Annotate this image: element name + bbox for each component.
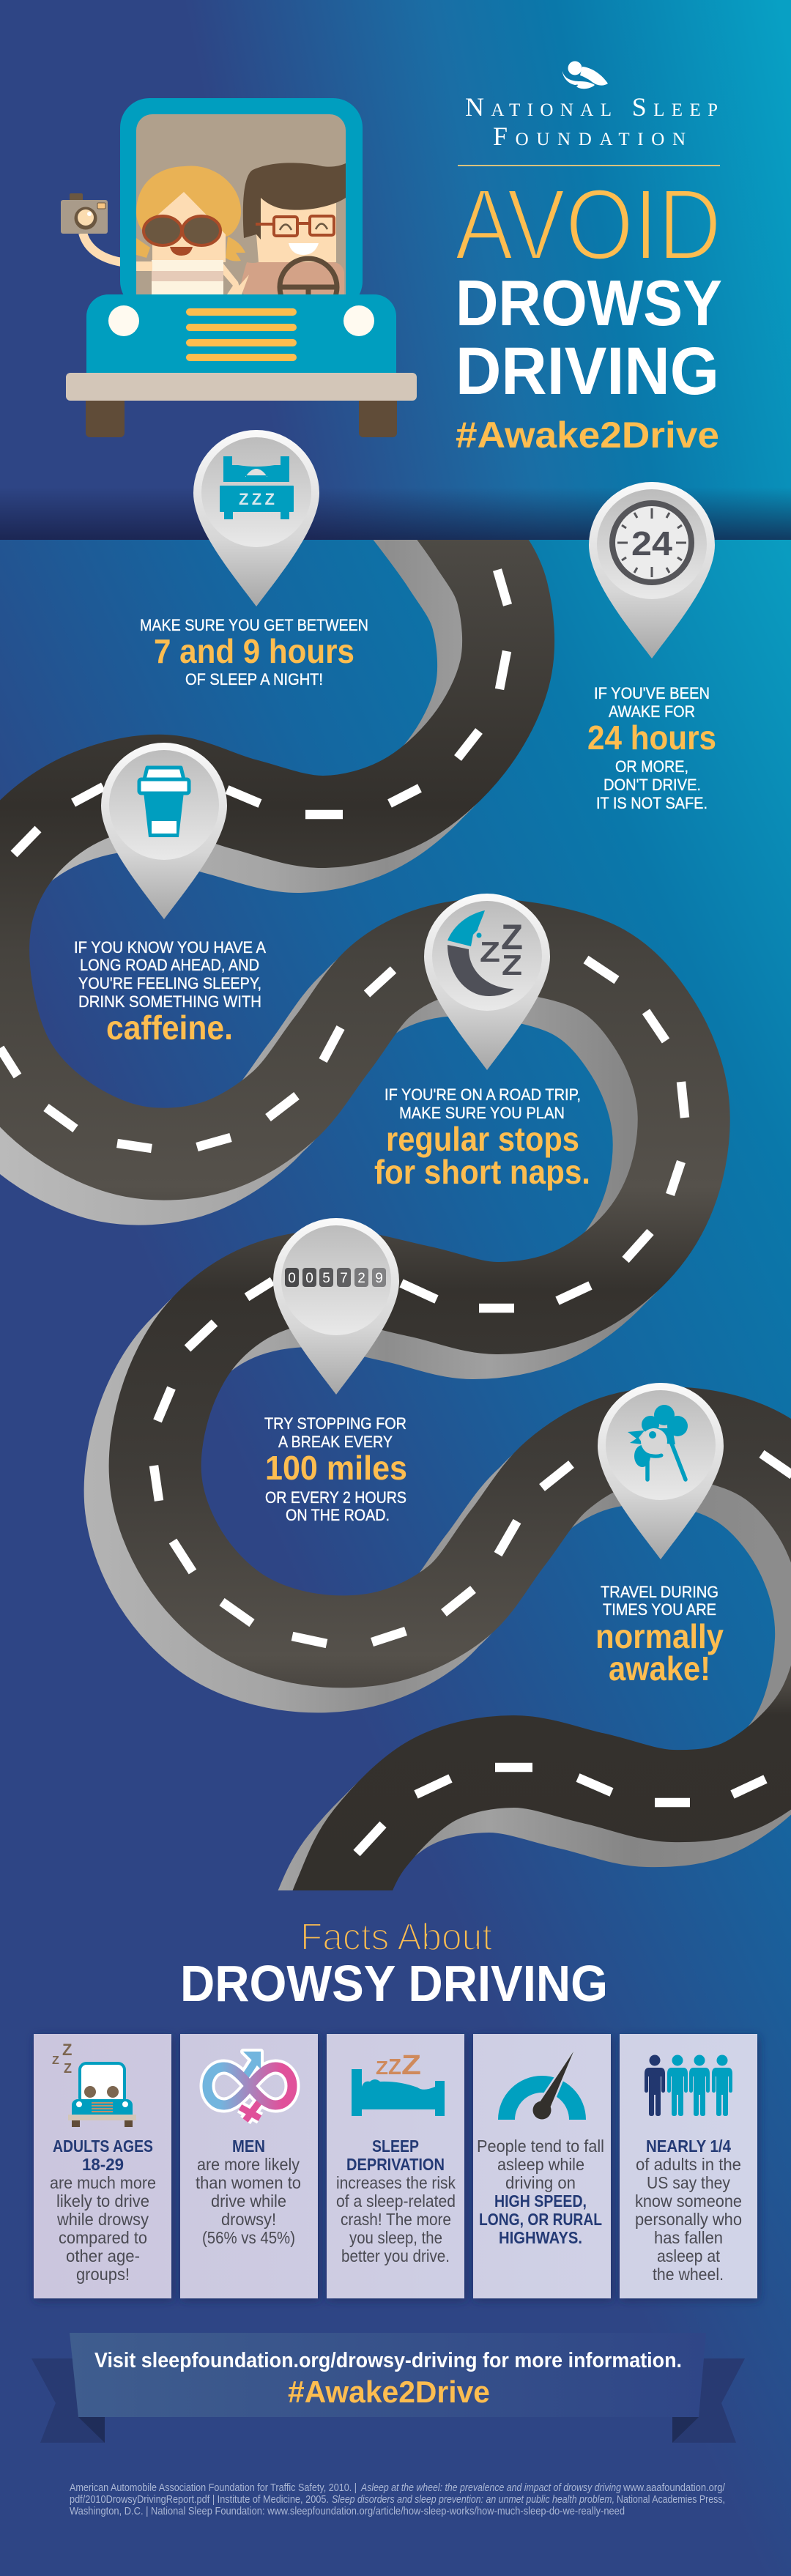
logo wordmark: National Sleep [465, 92, 718, 122]
caption: caffeine: LONG ROAD AHEAD, AND [80, 956, 259, 974]
logo wordmark [465, 92, 718, 151]
card text: while drowsy [56, 2210, 149, 2229]
card text: are more likely [197, 2155, 300, 2174]
caption: normally awake [595, 1583, 724, 1688]
caption: 24 hours: 24 hours [587, 719, 716, 757]
caption: mileage: TRY STOPPING FOR [264, 1414, 406, 1433]
ribbon body [70, 2333, 706, 2417]
panel: adults ages 18-29 [34, 2034, 171, 2298]
background: lower section [0, 540, 791, 2576]
icon: bed [220, 456, 294, 519]
card text: of adults in the [636, 2155, 741, 2174]
card text [196, 2137, 301, 2247]
card text: MEN [232, 2137, 265, 2156]
card text: People tend to fall [477, 2137, 604, 2156]
caption: sleep hours [140, 616, 368, 688]
camera [61, 193, 108, 234]
card text: US say they [647, 2173, 730, 2192]
icon: moon with nightcap: Z [501, 918, 523, 957]
caption: caffeine: IF YOU KNOW YOU HAVE A [74, 938, 266, 957]
card text: other age- [66, 2246, 140, 2265]
card text [635, 2137, 742, 2284]
pin: sleep hours [193, 430, 319, 606]
heading: facts about drowsy driving: Facts About [300, 1916, 493, 1959]
icon: odometer: 5 [322, 1271, 330, 1286]
card text: of a sleep-related [336, 2191, 456, 2211]
card text: asleep at [657, 2246, 721, 2265]
caption: 24 hours: IF YOU'VE BEEN [594, 684, 710, 702]
banner text: Visit sleepfoundation.org/drowsy-driving for more information. [94, 2349, 682, 2372]
caption: 24 hours [587, 684, 716, 812]
icon: sleepy truck: Z [62, 2041, 72, 2059]
window interior [136, 114, 346, 294]
headlights [108, 305, 139, 336]
passenger [136, 166, 245, 294]
caption: naps: IF YOU'RE ON A ROAD TRIP, [385, 1085, 581, 1104]
caption: naps [374, 1085, 590, 1191]
icon: clock [612, 503, 691, 582]
icon: coffee cup [139, 768, 189, 837]
card text: drive while [211, 2191, 286, 2211]
divider rule [458, 165, 720, 166]
caption: 24 hours: AWAKE FOR [609, 702, 695, 721]
caption: caffeine: YOU'RE FEELING SLEEPY, [78, 974, 261, 992]
icon: odometer [285, 1268, 386, 1287]
card text: compared to [59, 2228, 147, 2247]
caption: sleep hours: MAKE SURE YOU GET BETWEEN [140, 616, 368, 634]
logo wordmark: Foundation [493, 122, 686, 151]
pin: mileage [273, 1218, 399, 1395]
ribbon tails [31, 2358, 745, 2443]
caption: sleep hours: 7 and 9 hours [154, 632, 354, 670]
title: DROWSY [456, 267, 722, 339]
card text: (56% vs 45%) [202, 2228, 295, 2247]
caption: 24 hours: OR MORE, [615, 757, 688, 776]
caption: naps: MAKE SURE YOU PLAN [399, 1104, 565, 1122]
icon: moon with nightcap: Z [502, 950, 522, 981]
card text: SLEEP [372, 2137, 419, 2156]
steering wheel [277, 256, 340, 294]
card text: LONG, OR RURAL [479, 2210, 602, 2229]
footer: references: pdf/2010DrowsyDrivingReport.pdf | Institute of Medicine, 2005. [70, 2494, 329, 2506]
card text: personally who [635, 2210, 742, 2229]
caption: mileage: 100 miles [265, 1449, 407, 1487]
caption: normally awake: TRAVEL DURING [601, 1583, 718, 1601]
banner: call to action [31, 2333, 745, 2443]
icon: sleepy truck [52, 2041, 136, 2127]
bumper [66, 373, 417, 401]
card text [50, 2137, 156, 2284]
icon: speedometer [498, 2052, 586, 2120]
icon: bed: Z [376, 2057, 388, 2079]
card text: ADULTS AGES [53, 2137, 153, 2156]
icon: bed [352, 2050, 445, 2116]
driver [239, 163, 346, 294]
caption: mileage: OR EVERY 2 HOURS [265, 1488, 406, 1507]
banner text: #Awake2Drive [288, 2375, 490, 2409]
icon: bed: ZZZ [239, 490, 275, 508]
icon: bed: Z [401, 2050, 421, 2081]
footer: references: www.aaafoundation.org/ [623, 2482, 726, 2494]
card text: 18-29 [82, 2155, 124, 2174]
road surface [0, 483, 791, 1948]
pin: naps [424, 894, 550, 1070]
icon: rooster [628, 1405, 688, 1480]
caption: naps: for short naps. [374, 1153, 590, 1191]
caption: mileage [264, 1414, 407, 1524]
pin: 24 hours [589, 482, 715, 658]
heading: facts about drowsy driving [180, 1916, 608, 2012]
icon: odometer: 9 [375, 1271, 383, 1286]
card text: HIGHWAYS. [499, 2228, 582, 2247]
card text: the wheel. [653, 2265, 724, 2284]
title: DRIVING [456, 334, 719, 409]
winding road [0, 483, 791, 1973]
caption: normally awake: awake! [609, 1649, 710, 1688]
camera arm [83, 233, 122, 262]
icon: bed: Z [388, 2054, 401, 2079]
caption: 24 hours: DON'T DRIVE. [604, 776, 701, 794]
road side wall [0, 496, 791, 1973]
footer: references: Asleep at the wheel: the prevalence and impact of drowsy driving [360, 2482, 621, 2494]
grille [186, 308, 297, 361]
caption: caffeine: caffeine. [106, 1009, 233, 1047]
card text: has fallen [654, 2228, 723, 2247]
caption: naps: regular stops [386, 1120, 579, 1158]
card text: you sleep, the [349, 2228, 442, 2247]
panel: men [180, 2034, 318, 2298]
hood [86, 294, 396, 374]
card text [477, 2137, 604, 2247]
caption: normally awake: TIMES YOU ARE [603, 1600, 716, 1619]
icon: odometer: 0 [288, 1271, 296, 1286]
icon: odometer: 0 [305, 1271, 313, 1286]
caption: mileage: ON THE ROAD. [286, 1506, 390, 1524]
card text: than women to [196, 2173, 301, 2192]
caption: mileage: A BREAK EVERY [278, 1433, 393, 1451]
title: AVOID [455, 168, 721, 281]
card text: know someone [635, 2191, 742, 2211]
title: #Awake2Drive [456, 415, 719, 456]
card text: likely to drive [56, 2191, 149, 2211]
caption: sleep hours: OF SLEEP A NIGHT! [185, 670, 323, 688]
card text: drowsy! [221, 2210, 276, 2229]
cab [120, 98, 363, 311]
heading: facts about drowsy driving: DROWSY DRIVING [180, 1955, 608, 2012]
card text: HIGH SPEED, [494, 2191, 587, 2211]
card text: asleep while [497, 2155, 584, 2174]
icon: odometer: 7 [340, 1271, 348, 1286]
card text: driving on [505, 2173, 576, 2192]
footer: references: Washington, D.C. | National Sleep Foundation: www.sleepfoundation.org/article/how-sleep-works/how-much-sleep-do-we-really-need [70, 2506, 625, 2517]
footer: references: American Automobile Association Foundation for Traffic Safety, 2010. | [70, 2482, 357, 2494]
icon: odometer: 2 [357, 1271, 365, 1286]
card text: crash! The more [341, 2210, 451, 2229]
road centre dashes [0, 570, 791, 1853]
icon: clock: 24 [631, 524, 672, 563]
icon: moon with nightcap [448, 910, 523, 996]
card text: DEPRIVATION [346, 2155, 445, 2174]
caption: normally awake: normally [595, 1617, 724, 1655]
icon: National Sleep Foundation logo [562, 62, 608, 89]
card text: better you drive. [341, 2246, 450, 2265]
icon: four people [645, 2055, 732, 2116]
footer: references: Sleep disorders and sleep prevention: an unmet public health problem, [332, 2494, 614, 2506]
header section background [0, 0, 791, 540]
panel: nearly one quarter [620, 2034, 757, 2298]
wheels [86, 401, 125, 437]
panel: highways [473, 2034, 611, 2298]
title [455, 168, 722, 456]
icon: sleepy truck: Z [52, 2055, 59, 2067]
icon: moon with nightcap: Z [480, 937, 500, 968]
panel: sleep deprivation [327, 2034, 464, 2298]
card text: groups! [76, 2265, 130, 2284]
card text: are much more [50, 2173, 156, 2192]
caption: 24 hours: IT IS NOT SAFE. [596, 794, 708, 812]
pin: caffeine [101, 743, 227, 919]
card text: NEARLY 1/4 [646, 2137, 731, 2156]
caption: caffeine [74, 938, 266, 1047]
card text [336, 2137, 456, 2265]
icon: gender infinity [207, 2052, 292, 2120]
icon: sleepy truck: Z [64, 2061, 72, 2076]
banner text [94, 2349, 682, 2409]
pin: normally awake [598, 1383, 724, 1559]
truck illustration with driver and passenger [61, 98, 417, 437]
caption: caffeine: DRINK SOMETHING WITH [78, 992, 261, 1011]
footer: references [70, 2482, 726, 2517]
card text: increases the risk [336, 2173, 456, 2192]
footer: references: National Academies Press, [617, 2494, 725, 2506]
